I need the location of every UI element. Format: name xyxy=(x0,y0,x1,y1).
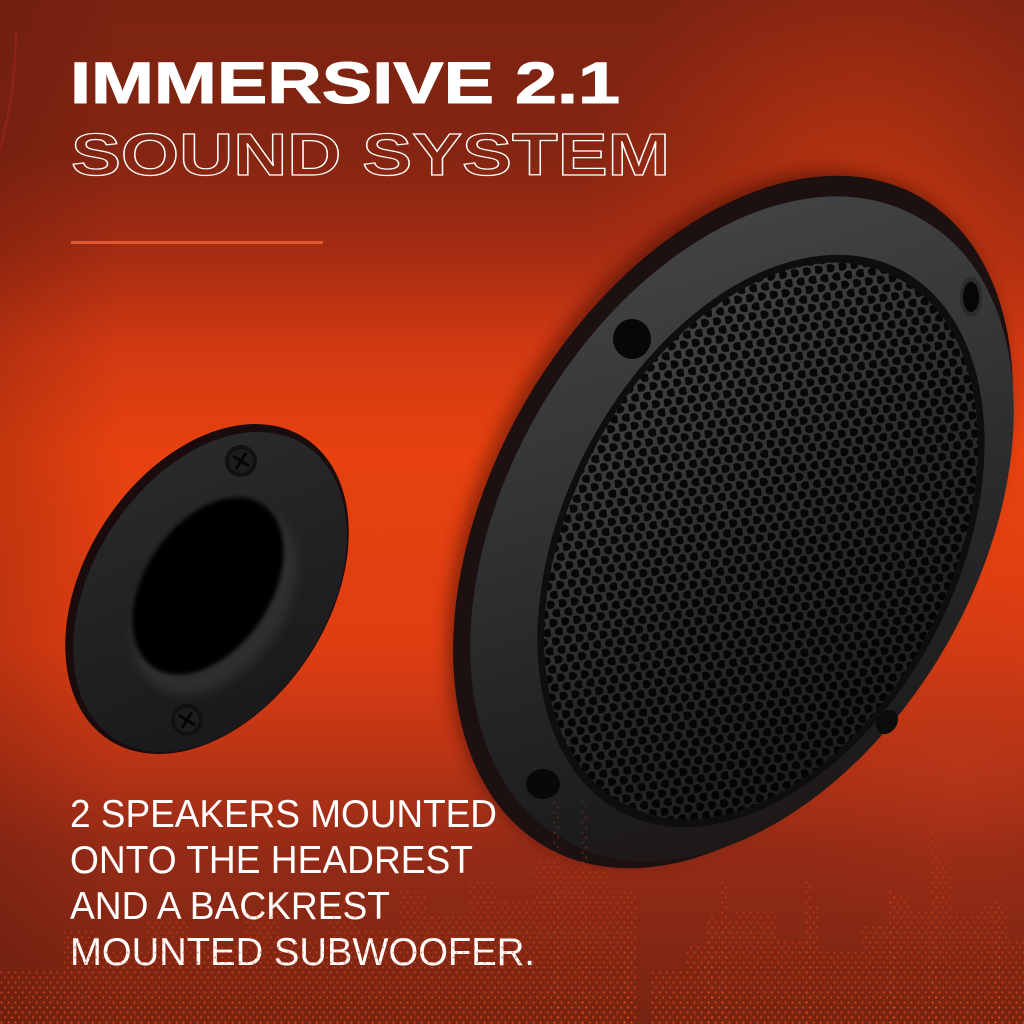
body text xyxy=(70,793,535,974)
speaker grille mesh xyxy=(544,263,978,819)
screw hole top right xyxy=(960,277,982,317)
subwoofer port xyxy=(65,424,349,754)
port screw bottom xyxy=(171,704,203,736)
speaker rim xyxy=(470,196,1014,862)
strong dot columns xyxy=(553,800,1001,1024)
screw hole bottom right xyxy=(871,706,903,738)
title line 1: IMMERSIVE 2.1 xyxy=(70,51,620,116)
speaker shadow xyxy=(331,71,1024,961)
port funnel highlight xyxy=(98,475,330,725)
divider line xyxy=(71,241,323,244)
body text: AND A BACKREST xyxy=(70,885,390,928)
body text: 2 SPEAKERS MOUNTED xyxy=(70,793,497,836)
body text: MOUNTED SUBWOOFER. xyxy=(70,931,535,974)
title xyxy=(70,51,670,188)
speaker outer lip xyxy=(338,77,1024,967)
screw hole top left xyxy=(613,319,651,359)
port screw top xyxy=(225,445,257,477)
port flange xyxy=(73,432,347,752)
base dot field xyxy=(0,860,1024,1024)
port opening xyxy=(101,470,315,702)
large speaker xyxy=(331,71,1024,967)
speaker inner ring xyxy=(537,255,985,827)
screw hole bottom left xyxy=(526,769,560,799)
title line 2 outlined: SOUND SYSTEM xyxy=(71,122,670,188)
body text: ONTO THE HEADREST xyxy=(70,839,473,882)
port outer lip xyxy=(65,424,349,754)
equalizer dot pattern xyxy=(0,800,1024,1024)
